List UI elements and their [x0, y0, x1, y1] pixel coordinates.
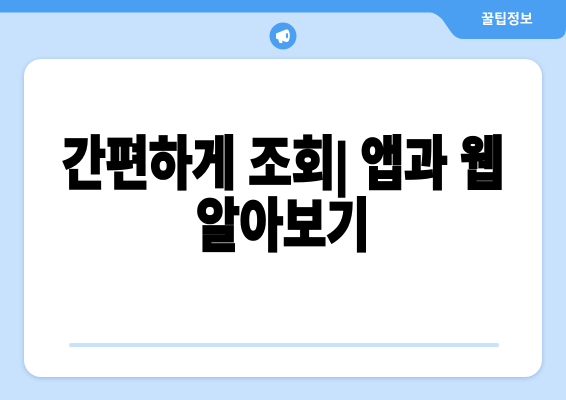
white card [24, 59, 542, 377]
top blue band and tab [0, 0, 566, 39]
icon: megaphone badge [270, 22, 296, 50]
title: 알아보기 [196, 194, 370, 259]
title [62, 132, 504, 259]
title: 간편하게 조회| 앱과 웹 [62, 132, 504, 197]
tab label: 꿀팁정보 [481, 11, 533, 27]
divider bar [69, 343, 499, 347]
